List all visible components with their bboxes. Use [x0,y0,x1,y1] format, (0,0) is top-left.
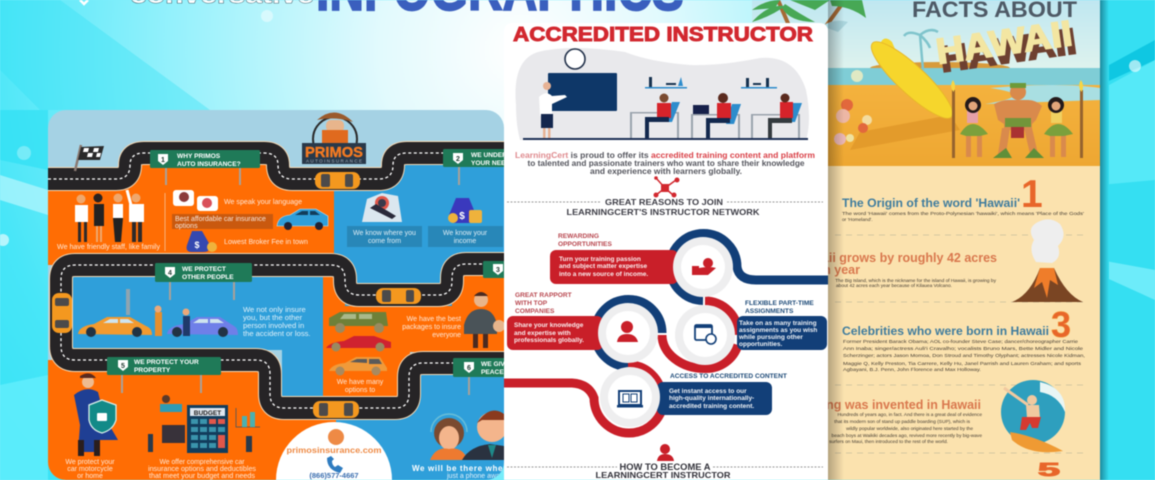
fact 2: each year [802,263,860,277]
heading: how to become [507,462,823,480]
sign 2: we understand: YOUR NEEDS [471,160,515,167]
block: broker fee [187,231,308,252]
block: support agents: We will be there when [412,464,508,473]
reason: flexible part-time: while pursuing other [738,334,803,341]
block: language [173,190,302,211]
reason: rewarding opportunities: and subject matter expertise [559,263,648,270]
panel shadow [828,0,844,480]
block: where you come from [347,193,422,247]
Hawaii beach scene [752,0,1100,480]
sign 2: we understand: 2 [456,156,460,163]
block: broker fee: $ [194,240,200,250]
chief figure [993,83,1044,158]
shelves [645,77,777,88]
sign 6: we give peace: 6 [467,365,471,372]
fact 3: Celebrities who were born in Hawaii [842,324,1049,338]
map colour regions [48,153,504,480]
panel: Primos auto insurance roadmap [48,110,529,480]
fact 3: Former President Barack Obama; AOL co-founder Steve Case; dancer/choreographer Carrie [843,339,1078,345]
block: where you come from: come from [368,238,401,245]
palm trees [752,0,866,32]
intro paragraph: to talented and passionate trainers who want to share their knowledge [528,159,805,168]
fact 4: beach boys at Waikiki decades ago, revived more recently by big-wave [832,433,982,439]
fact 1: The Origin of the word 'Hawaii' [842,196,1020,210]
sign 6: we give peace [453,358,510,377]
flower lei [834,70,872,145]
sign 4: we protect other people: 4 [168,270,172,277]
fact 3 [835,304,1088,385]
block: friendly staff [57,190,161,251]
fact 5 number: 5 [1038,460,1060,480]
block: other people scene: We not only insure [243,305,306,314]
block: broker fee: Lowest Broker Fee in town [224,239,308,246]
reason: access to accredited content: accredited training content. [669,403,754,410]
road: upper [48,153,504,179]
block: budget [148,395,260,480]
fact 4: Hundreds of years ago, in fact. And there is a great deal of evidence [837,412,982,418]
icon: person [617,321,638,342]
block: budget: insurance options and deductibles [148,466,257,473]
block: where you come from: We know where you [353,230,416,237]
reason: great rapport [507,292,658,363]
fact 4: Surfing was invented in Hawaii [798,398,981,412]
reason: great rapport: COMPANIES [515,308,555,315]
logo: Primos Auto Insurance: AUTOINSURANCE [306,158,362,164]
block: other people scene: the accident or loss. [243,329,311,338]
fact 3: Agbayani, B.J. Penn, John Florence and Max Holloway. [843,367,981,373]
sign 4: we protect other people: WE PROTECT [182,266,226,273]
heading: how to become: LEARNINGCERT INSTRUCTOR [596,470,730,480]
block: best packages: packages to insure [402,324,461,331]
icon: businessman thumbs up [464,292,505,348]
reason: rewarding opportunities [550,233,733,297]
reason: great rapport: and expertise with [514,330,571,337]
panel edge shadow [1100,0,1109,480]
sign 1: why primos: WHY PRIMOS [177,153,221,160]
icon: office team [75,190,144,242]
fact 1: The word 'Hawaii' comes from the Proto-Polynesian 'hawaiki', which means 'Place of the Gods' [842,211,1084,217]
block: support agents: just a phone away [446,473,504,480]
reason: access to accredited content: Get instant access to our [669,388,747,395]
reason: access to accredited content [600,367,787,427]
contact circle: (866)577-4667 [309,471,359,480]
heading: accredited instructor: ACCREDITED INSTRUCTOR [513,24,814,46]
reason: access to accredited content: high-quality internationally- [669,395,754,402]
block: affordable options: options [175,223,198,230]
block: best packages: everyone [432,332,461,339]
block: many options cars: options to [345,387,375,394]
sign 4: we protect other people: OTHER PEOPLE [182,274,234,281]
reason: flexible part-time [675,300,827,365]
sign 5: we protect your property: PROPERTY [134,367,171,374]
fact 4: surfers on Maui, then introduced to the rest of the world. [829,439,948,445]
fact 2: about 42 acres each year because of Kilauea Volcano. [836,283,952,289]
reason: flexible part-time: FLEXIBLE PART-TIME [745,300,814,307]
fact 1: or 'Homeland'. [842,217,873,223]
Hawaii lettering: HAWAII [933,12,1075,72]
panel: accredited instructor [504,23,828,480]
block: budget: We offer comprehensive car [160,459,245,466]
students at desks [630,93,802,139]
title: check mark [80,0,88,4]
icon: checkered flag [75,145,104,171]
block: support agents [412,411,508,480]
distant palm [904,30,938,70]
block: best packages [402,292,505,348]
block: friendly staff: We have friendly staff, like family [57,244,161,251]
reason: flexible part-time: opportunities. [739,341,783,348]
car: left vertical road [52,293,72,333]
reason: rewarding opportunities: Turn your training passion [559,256,641,263]
surfboard [870,38,952,119]
reason: access to accredited content: ACCESS TO ACCREDITED CONTENT [670,373,787,380]
sign 5: we protect your property [107,357,221,375]
block: many options cars: We have many [337,379,384,386]
reason: great rapport: GREAT RAPPORT [515,292,572,299]
block: other people scene [78,289,311,338]
car: lower road right [376,288,421,304]
heading: great reasons: LEARNINGCERT'S INSTRUCTOR NETWORK [566,207,760,217]
hula dancer right [1044,97,1073,157]
contact circle [276,422,392,480]
icon: book on laptop [617,391,643,408]
block: many options cars [326,312,391,394]
block: budget: BUDGET [194,410,221,417]
reason: flexible part-time: Take on as many training [739,320,817,327]
icon: clock [565,49,585,69]
icon: surfer on a wave [1001,380,1065,452]
car: upper road [315,172,360,189]
block: affordable options: Best affordable car insurance [175,216,266,223]
reason: rewarding opportunities: REWARDING [558,233,599,240]
divider [164,193,166,251]
hula dancer left [960,97,988,157]
block: best packages: We have the best [407,316,461,323]
intro paragraph [515,151,815,176]
block: budget: that meet your budget and needs [149,473,256,480]
reason: rewarding opportunities: into a new source of income. [559,271,648,278]
fact 1: 1 [1021,173,1043,216]
sign posts [121,167,470,395]
fact 2: The Big Island, which is the nickname for the island of Hawaii, is growing by [835,278,997,284]
block: other people scene: you, but the other [243,313,303,322]
block: income [428,198,503,247]
reason: rewarding opportunities: OPPORTUNITIES [558,241,612,248]
reason: flexible part-time: ASSIGNMENTS [745,308,794,315]
heading: great reasons [507,197,823,217]
icon: money hand [692,258,716,275]
contact circle: primosinsurance.com [286,445,382,455]
Hawaii lettering: HAWAII [937,20,1079,80]
intro paragraph: LearningCert is proud to offer its accredited training content and platform [515,151,815,160]
sign 3: 3 [496,267,500,274]
icon: calendar clock [695,325,716,344]
sign 1: why primos: AUTO INSURANCE? [177,161,241,168]
reason: great rapport: Share your knowledge [514,322,584,329]
fact 3: Maggie Q, Kelly Preston, Tia Carrere, Kelly Hu, Janel Parrish and Lauren Graham; and sports [843,361,1082,367]
block: language: We speak your language [224,199,302,206]
fact 2: Hawaii grows by roughly 42 acres [796,251,997,265]
block: income: We know your [443,230,488,237]
heading: how to become: HOW TO BECOME A [620,462,711,472]
sign 6: we give peace: PEACE [481,369,504,376]
sign 3 [483,261,505,278]
icon: network [654,176,680,198]
block: hero [65,373,118,480]
icon: blue car [277,209,328,230]
fact 1 [835,180,1084,236]
fact 3: 3 [1051,304,1071,345]
sign 6: we give peace: WE GIVE [481,361,510,368]
sign 2: we understand: WE UNDERSTAND [471,152,529,159]
reason: great rapport: WITH TOP [515,300,548,307]
block: other people scene: person involved in [243,321,304,330]
logo: Primos Auto Insurance: PRIMOS [305,144,363,161]
fact 4 [828,399,1083,454]
block: hero: car motorcycle [67,466,113,473]
reason: great rapport: professionals globally. [514,337,584,344]
fact 4: wildly popular worldwide, also originated here started by the [846,426,973,432]
tiki torches [951,80,1083,158]
sign 5: we protect your property: WE PROTECT YOUR [134,359,199,366]
block: hero: or home [77,473,103,480]
fact 3: Scherzinger; actors Jason Momoa, Don Stroud and Timothy Olyphant; actresses Nicole Kidman, [843,353,1085,359]
teacher [539,82,567,139]
sign 4: we protect other people [155,263,252,282]
blackboard [548,73,617,111]
sign 5: we protect your property: 5 [121,363,125,370]
panel: Hawaii facts [752,0,1100,480]
block: affordable options [172,209,328,230]
classroom illustration [515,48,809,140]
icon: person bottom [657,444,674,461]
reason: flexible part-time: assignments as you wish [739,327,817,334]
fact 4: that its modern son of stand up paddle boarding (SUP), which is [834,419,971,425]
fact 2 [828,252,1083,303]
ribbon diagram [504,234,828,433]
logo: Primos Auto Insurance [302,112,366,164]
heading: great reasons: GREAT REASONS TO JOIN [605,197,723,207]
block: income: income [454,238,476,245]
sign 1: why primos: 1 [161,157,165,164]
block: hero: We protect your [65,459,115,466]
fact 3: Ann Inaba; singer/actress Auli'i Cravalho; vocalists Bruno Mars, Bette Midler and Nicole [843,346,1083,352]
block: income: $ [459,211,465,222]
intro paragraph: and experience with learners globally. [590,167,742,176]
road: lower winding [61,264,504,408]
sign 1: why primos [150,150,260,168]
car: bottom road [313,401,359,418]
sign 2: we understand [442,148,505,168]
icon: volcano [1012,219,1083,302]
